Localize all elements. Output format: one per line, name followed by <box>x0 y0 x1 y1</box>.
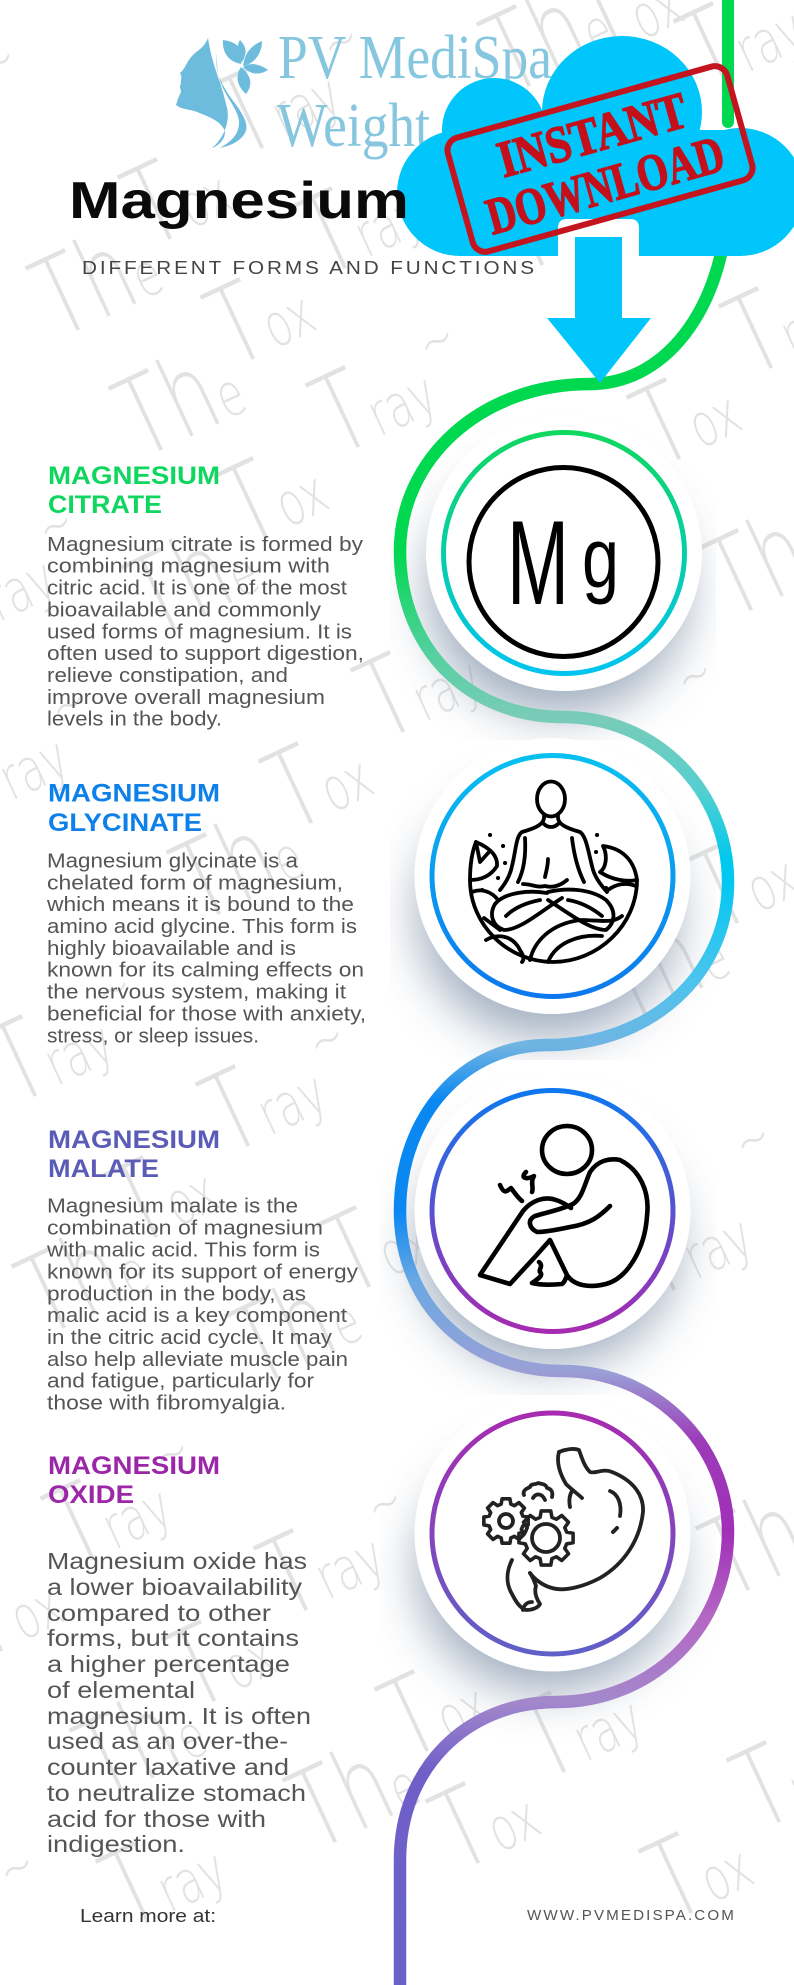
footer: website: WWW.PVMEDISPA.COM <box>527 1908 736 1924</box>
text: magnesium malate body <box>46 1196 358 1415</box>
text: magnesium oxide body: a lower bioavailability <box>47 1574 302 1600</box>
text: magnesium citrate body: citric acid. It is one of the most <box>47 577 347 599</box>
text: magnesium oxide body: to neutralize stomach <box>47 1780 306 1806</box>
watermark: The Tox Tray pattern: Tray <box>84 1793 242 1957</box>
watermark: The Tox Tray pattern: ~ <box>354 1465 415 1543</box>
text: magnesium oxide body: a higher percentage <box>47 1651 290 1677</box>
watermark: The Tox Tray pattern: ~ <box>38 666 99 744</box>
text: magnesium citrate body: levels in the body. <box>47 709 222 731</box>
text: magnesium oxide body: forms, but it contains <box>47 1625 299 1651</box>
text: magnesium glycinate body: the nervous system, making it <box>47 982 346 1004</box>
circle: magnesium glycinate icon <box>414 738 690 1014</box>
text: magnesium oxide body: of elemental <box>47 1677 195 1703</box>
heading: magnesium malate: MALATE <box>48 1155 159 1183</box>
watermark: The Tox Tray pattern: Tray <box>184 1016 342 1180</box>
watermark: The Tox Tray pattern: The <box>478 132 643 299</box>
text: magnesium oxide body <box>47 1548 311 1857</box>
watermark: The Tox Tray pattern: Tox <box>570 52 712 208</box>
text: magnesium glycinate body <box>46 850 366 1047</box>
watermark: The Tox Tray pattern: Tox <box>305 1165 447 1321</box>
watermark: The Tox Tray pattern: Tox <box>414 1741 556 1897</box>
logo text line 2: Weight <box>277 92 430 160</box>
heading: magnesium malate: MAGNESIUM <box>48 1126 220 1154</box>
text: magnesium glycinate body: highly bioavailable and is <box>47 938 296 960</box>
text: magnesium glycinate body: Magnesium glycinate is a <box>47 850 299 872</box>
watermark: The Tox Tray pattern: Tox <box>189 237 331 393</box>
watermark: The Tox Tray pattern: Tray <box>281 138 439 302</box>
circle shadows <box>418 465 688 1692</box>
text: magnesium glycinate body: beneficial for those with anxiety, <box>47 1003 366 1025</box>
text: magnesium oxide body: indigestion. <box>47 1831 185 1857</box>
text: magnesium oxide body: used as an over-the- <box>47 1728 288 1754</box>
watermark: The Tox Tray pattern: Tray <box>242 1480 400 1644</box>
text: magnesium glycinate body: chelated form of magnesium, <box>47 872 343 894</box>
icon: Mg symbol: g <box>582 511 619 605</box>
icon: Mg symbol: M <box>507 496 569 630</box>
watermark: The Tox Tray pattern: ~ <box>722 1101 783 1179</box>
icon: person with joint pain <box>480 1126 648 1286</box>
icon: download cloud <box>397 36 794 256</box>
icon: face and flower <box>176 38 268 148</box>
footer: learn more: Learn more at: <box>80 1906 216 1926</box>
watermark: The Tox Tray pattern: Tray <box>610 1160 768 1324</box>
text: magnesium citrate body: relieve constipation, and <box>47 665 288 687</box>
watermark: The Tox Tray pattern: The <box>155 781 320 948</box>
text: magnesium citrate body: Magnesium citrate is formed by <box>47 534 363 556</box>
text: magnesium malate body: those with fibromyalgia. <box>47 1393 286 1415</box>
watermark: The Tox Tray pattern: ~ <box>83 951 144 1029</box>
watermark: The Tox Tray pattern: The <box>523 417 688 584</box>
watermark: The Tox Tray pattern: The <box>213 1245 378 1412</box>
icon: meditating person <box>470 782 637 962</box>
text: magnesium citrate body: used forms of magnesium. It is <box>47 621 352 643</box>
text: magnesium malate body: in the citric acid cycle. It may <box>47 1327 332 1349</box>
heading: magnesium oxide: MAGNESIUM <box>48 1452 220 1480</box>
text: magnesium glycinate body: known for its calming effects on <box>47 960 364 982</box>
heading: magnesium citrate <box>48 462 220 519</box>
watermark: The Tox Tray pattern: ~ <box>296 1001 357 1079</box>
heading: magnesium glycinate: GLYCINATE <box>48 809 202 837</box>
circle: magnesium malate icon <box>414 1073 690 1349</box>
heading: magnesium glycinate: MAGNESIUM <box>48 780 220 808</box>
heading: magnesium malate <box>48 1126 220 1183</box>
watermark: The Tox Tray pattern: ~ <box>141 1415 202 1493</box>
watermark: The Tox Tray pattern: ~ <box>310 3 371 81</box>
text: magnesium citrate body: improve overall magnesium <box>47 687 325 709</box>
text: magnesium oxide body: acid for those with <box>47 1806 266 1832</box>
watermark: The Tox Tray pattern: ~ <box>25 487 86 565</box>
icon: stomach with gears <box>484 1449 643 1610</box>
text: magnesium citrate body: often used to support digestion, <box>47 643 364 665</box>
watermark: The Tox Tray pattern: The <box>97 317 262 484</box>
text: magnesium malate body: with malic acid. This form is <box>46 1239 320 1261</box>
subtitle: DIFFERENT FORMS AND FUNCTIONS <box>82 258 537 278</box>
watermark: The Tox Tray pattern: ~ <box>664 637 725 715</box>
watermark: The Tox Tray pattern: ~ <box>406 302 467 380</box>
heading: magnesium oxide: OXIDE <box>48 1481 134 1509</box>
watermark: The Tox Tray pattern: Tox <box>247 701 389 857</box>
text: magnesium malate body: also help alleviate muscle pain <box>47 1349 348 1371</box>
circle: magnesium oxide icon <box>414 1396 690 1672</box>
watermark: The Tox Tray pattern: ~ <box>393 123 454 201</box>
text: magnesium oxide body: Magnesium oxide has <box>47 1548 307 1574</box>
title: Magnesium <box>69 172 409 230</box>
text: magnesium malate body: Magnesium malate is the <box>47 1196 298 1218</box>
text: magnesium citrate body: combining magnesium with <box>47 556 330 578</box>
stamp text line 2: DOWNLOAD <box>480 126 731 246</box>
heading: magnesium oxide <box>48 1452 220 1509</box>
text: magnesium malate body: combination of magnesium <box>47 1217 323 1239</box>
watermark: The Tox Tray pattern: Tox <box>627 1791 769 1947</box>
text: magnesium citrate body <box>47 534 364 731</box>
stamp: instant download <box>444 63 756 255</box>
text: magnesium malate body: malic acid is a key component <box>47 1305 347 1327</box>
text: magnesium oxide body: magnesium. It is often <box>47 1703 311 1729</box>
arrow: download arrow <box>547 237 651 383</box>
logo: PV MediSpa <box>176 24 552 160</box>
watermark: The Tox Tray pattern: Tox <box>615 337 757 493</box>
text: magnesium malate body: known for its support of energy <box>47 1261 358 1283</box>
logo text line 1: PV MediSpa <box>278 24 552 92</box>
watermark: The Tox Tray pattern: The <box>58 1659 223 1826</box>
text: magnesium citrate body: bioavailable and commonly <box>47 599 321 621</box>
stamp text line 1: INSTANT <box>491 82 694 189</box>
winding gradient path <box>400 190 728 1985</box>
text: magnesium glycinate body: stress, or sleep issues. <box>47 1025 259 1047</box>
watermark: The Tox Tray pattern: Tox <box>106 117 248 273</box>
watermark: The Tox Tray pattern: The <box>271 1709 436 1876</box>
text: magnesium oxide body: counter laxative and <box>47 1754 289 1780</box>
heading: magnesium citrate: MAGNESIUM <box>48 462 220 490</box>
heading: magnesium glycinate <box>48 780 220 837</box>
watermark: The Tox Tray pattern: Tray <box>29 1430 187 1594</box>
circle: magnesium citrate icon <box>426 415 702 691</box>
watermark: The Tox Tray pattern: Tox <box>150 1579 292 1735</box>
watermark: The Tox Tray pattern: Tox <box>363 1629 505 1785</box>
watermark: The Tox Tray pattern: Tray <box>294 317 452 481</box>
text: magnesium malate body: production in the body, as <box>47 1283 306 1305</box>
watermark: The Tox Tray pattern: Tray <box>339 602 497 766</box>
watermark: The Tox Tray pattern: The <box>0 1195 165 1362</box>
text: magnesium malate body: and fatigue, particularly for <box>47 1371 314 1393</box>
top segment of green path <box>722 0 734 122</box>
text: magnesium glycinate body: which means it is bound to the <box>46 894 354 916</box>
text: magnesium glycinate body: amino acid glycine. This form is <box>47 916 357 938</box>
icon: Mg symbol <box>469 468 658 656</box>
watermark: The Tox Tray pattern: Tray <box>500 1642 658 1806</box>
watermark: The Tox Tray pattern: The <box>581 881 746 1048</box>
watermark: The Tox Tray pattern: Tray <box>198 18 356 182</box>
watermark: The Tox Tray pattern: The <box>14 197 179 364</box>
watermark: The Tox Tray pattern: The <box>110 496 275 663</box>
watermark: The Tox Tray pattern: Tox <box>92 1115 234 1271</box>
heading: magnesium citrate: CITRATE <box>48 491 162 519</box>
watermark: The Tox Tray pattern: Tox <box>202 416 344 572</box>
text: magnesium oxide body: compared to other <box>47 1600 271 1626</box>
